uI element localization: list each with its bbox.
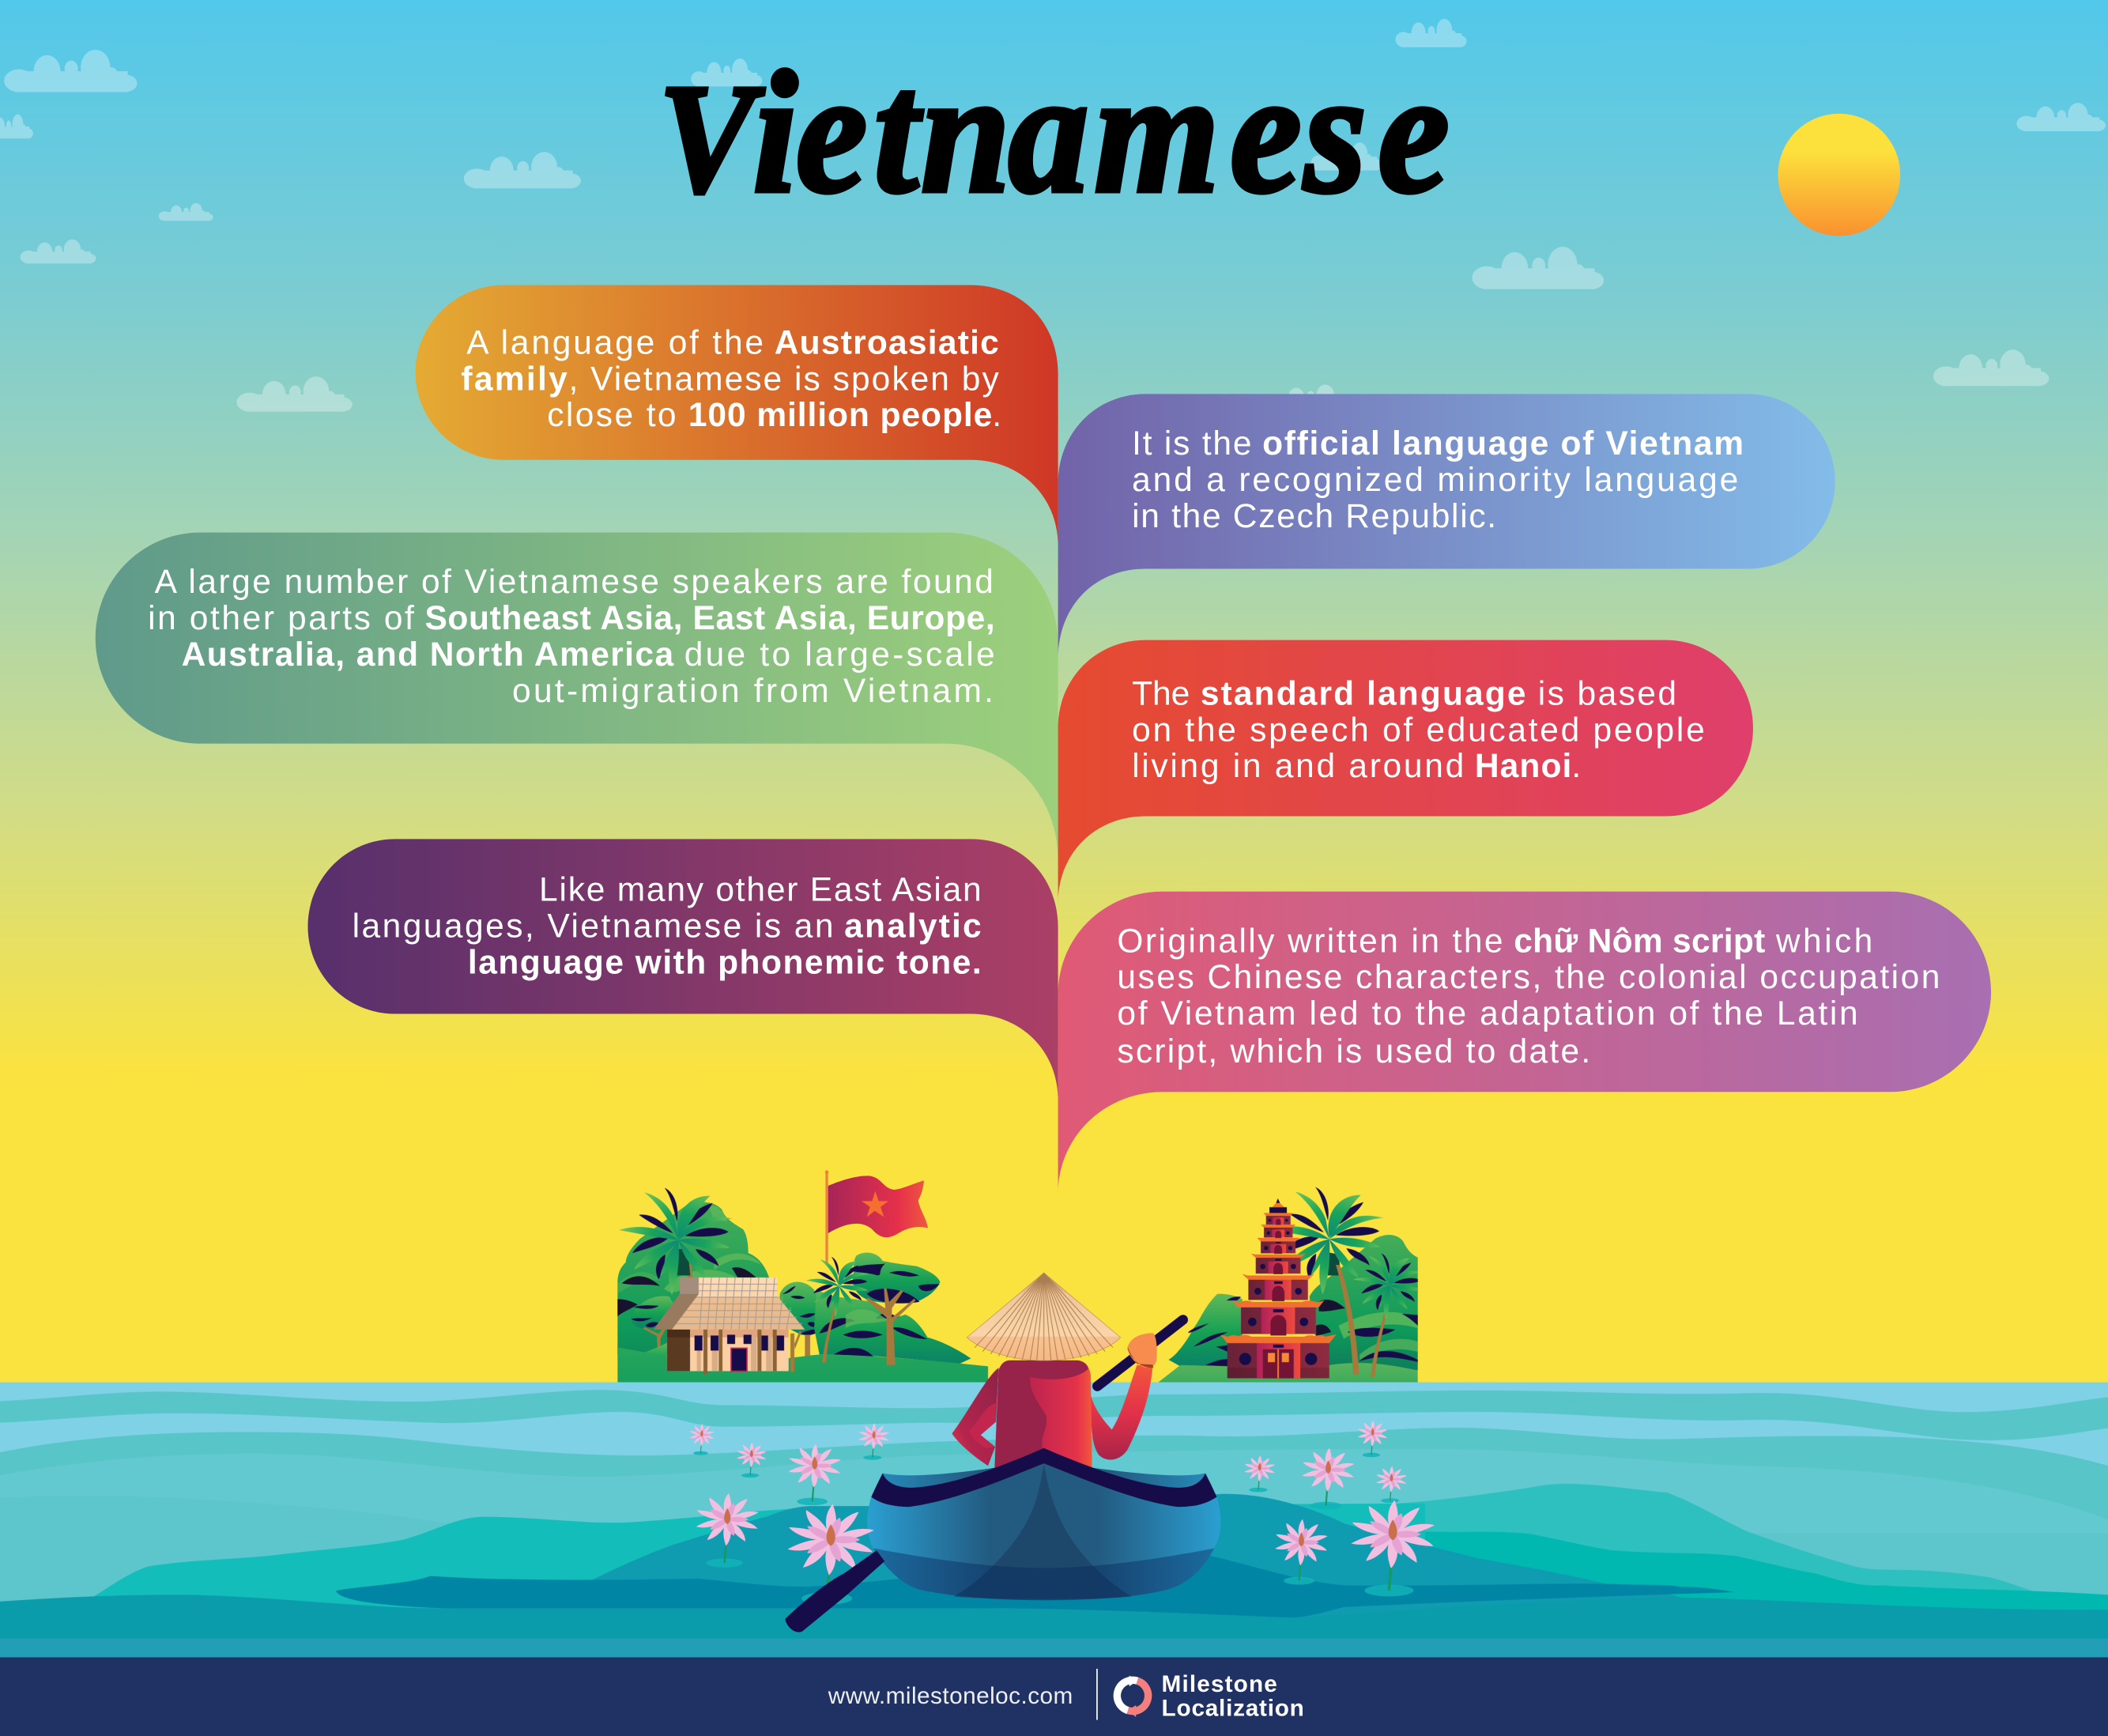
bubble: standard language: living in and around	[1132, 748, 1464, 785]
water: right green swell	[1425, 1531, 2108, 1658]
bush with tree left of house	[631, 1296, 682, 1372]
conical hat	[967, 1273, 1121, 1360]
bubble: speakers abroad: due to large-scale	[684, 636, 995, 674]
palm: left	[619, 1188, 733, 1295]
boat rim	[871, 1448, 1216, 1507]
hull centre shade	[954, 1463, 1132, 1599]
title: Vietnamese	[658, 36, 1450, 228]
right island with pagoda and palms	[1158, 1187, 1424, 1383]
bubble: writing script: Originally written in the	[1117, 923, 1503, 960]
palm: right small	[1353, 1253, 1424, 1377]
bubble: analytic language	[308, 839, 1058, 1100]
bubble: language family: 100 million people	[688, 397, 992, 434]
water: right teal swell	[1398, 1484, 2108, 1658]
house	[654, 1277, 805, 1374]
water: wave band 2	[0, 1428, 2108, 1658]
bubble: standard language: Hanoi	[1475, 748, 1571, 785]
water: bottom strip	[0, 1639, 2108, 1659]
water: deep shadow	[336, 1555, 1734, 1617]
water: wave band 1	[0, 1390, 2108, 1440]
bubble: analytic language: languages, Vietnamese is an	[353, 908, 834, 945]
bubble: official language: It is the	[1132, 425, 1252, 462]
logo wordmark	[1162, 1671, 1304, 1721]
hull	[867, 1463, 1220, 1600]
right hill shadows	[1316, 1300, 1418, 1362]
bubble: official language: and a recognized minority language	[1132, 462, 1738, 499]
paddler and boat	[867, 1273, 1220, 1600]
hull waterline shade	[873, 1549, 1214, 1600]
hill shadows	[617, 1267, 756, 1316]
palm: small middle	[806, 1257, 869, 1362]
pagoda	[1220, 1198, 1337, 1378]
bubble: standard language: is based	[1538, 675, 1676, 712]
right big hill	[1310, 1235, 1418, 1370]
bubble: writing script: which	[1775, 923, 1872, 960]
logo wordmark: Localization	[1162, 1695, 1304, 1721]
tier 4	[1256, 1258, 1300, 1274]
water: wave band 4	[0, 1496, 2108, 1658]
bubble: speakers abroad	[96, 533, 1058, 861]
bubble: analytic language: language with phonemic tone.	[468, 945, 982, 982]
bubble: analytic language: analytic	[844, 908, 982, 945]
front hill highlight	[846, 1309, 888, 1328]
tier 2	[1241, 1307, 1316, 1334]
website url: www.milestoneloc.com	[828, 1683, 1073, 1709]
water: foreground band	[0, 1594, 2108, 1640]
small hill shadows	[1188, 1296, 1241, 1366]
lotus flowers	[689, 1421, 1435, 1605]
logo ring	[1117, 1675, 1148, 1717]
bubble: official language: official language of Vietnam	[1262, 425, 1744, 462]
bubble: standard language: on the speech of educated people	[1132, 711, 1705, 749]
bubble: speakers abroad: Southeast Asia, East Asia, Europe,	[424, 600, 995, 637]
water: base	[0, 1383, 2108, 1658]
bubble: official language: in the Czech Republic.	[1132, 498, 1496, 535]
bubble: writing script: script, which is used to date.	[1117, 1033, 1590, 1070]
bubble: language family: A language of the	[466, 324, 764, 361]
bubble: speakers abroad: A large number of Vietnamese speakers are found	[155, 564, 994, 601]
large tree	[853, 1253, 940, 1365]
bubble: language family: family	[461, 360, 568, 398]
bubble: speakers abroad: out-migration from Vietnam.	[512, 673, 994, 710]
left arm	[952, 1368, 998, 1466]
tier 7	[1266, 1216, 1291, 1225]
bubble: standard language: .	[1571, 748, 1581, 785]
footer	[0, 1657, 2108, 1736]
logo divider	[1096, 1669, 1098, 1720]
tier 6	[1264, 1227, 1292, 1237]
bubble: writing script: chữ Nôm script	[1514, 923, 1765, 960]
left island with house, trees and flag	[617, 1170, 988, 1383]
right hill highlights	[1338, 1312, 1418, 1338]
bubble: writing script: of Vietnam led to the adaptation of the Latin	[1117, 995, 1858, 1032]
right arm	[1091, 1365, 1152, 1459]
bubble: standard language: standard language	[1201, 675, 1526, 712]
paddle lower blade	[785, 1550, 884, 1632]
clouds	[0, 19, 2106, 412]
bubble: language family: .	[992, 397, 1001, 434]
bubble: language family: , Vietnamese is spoken by	[568, 360, 999, 398]
ground left	[617, 1347, 988, 1383]
background: sky gradient	[0, 0, 2108, 1385]
bubble: writing script	[1058, 892, 1991, 1194]
front hill shadows	[820, 1313, 927, 1357]
bubble: language family: Austroasiatic	[775, 324, 999, 361]
water: dark swell	[443, 1494, 1748, 1658]
hill highlights	[617, 1206, 761, 1294]
paddle shaft	[1097, 1319, 1183, 1387]
sun	[1778, 114, 1900, 236]
torso shade	[994, 1360, 1088, 1470]
left small hill	[1168, 1294, 1243, 1366]
bubble: analytic language: Like many other East Asian	[539, 872, 982, 909]
bubble: official language	[1058, 394, 1835, 659]
tier 1	[1227, 1343, 1329, 1378]
bubble: writing script: uses Chinese characters, the colonial occupation	[1117, 959, 1940, 996]
back hill	[617, 1202, 777, 1383]
bubble: speakers abroad: Australia, and North America	[182, 636, 673, 674]
palm: right large	[1270, 1187, 1383, 1374]
hand	[1128, 1333, 1157, 1368]
bubble: language family	[416, 285, 1058, 546]
front hill under trees	[814, 1289, 971, 1364]
flag	[825, 1170, 928, 1265]
pagoda top	[1269, 1207, 1287, 1213]
bubble: standard language	[1058, 640, 1753, 904]
bubble: speakers abroad: in other parts of	[148, 600, 414, 637]
ground right	[1158, 1363, 1418, 1383]
water: left teal swell	[0, 1504, 1425, 1658]
bush behind house right	[780, 1281, 820, 1362]
bubble: language family: close to	[547, 397, 677, 434]
tier 5	[1261, 1241, 1295, 1253]
logo wordmark: Milestone	[1162, 1671, 1277, 1697]
bubble: standard language: The	[1132, 675, 1190, 712]
torso	[994, 1360, 1092, 1470]
left arm highlight	[969, 1403, 996, 1448]
tier 3	[1248, 1279, 1308, 1300]
water: wave band 3	[0, 1449, 2108, 1658]
boat interior	[883, 1462, 1205, 1489]
